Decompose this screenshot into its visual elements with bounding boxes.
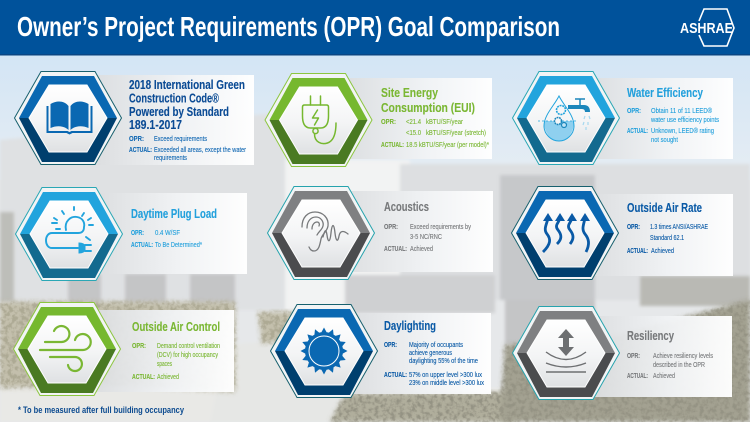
badge hexagon: book (14, 72, 122, 164)
icon: double arrow over curved layers (546, 329, 586, 372)
text: heading and values: ACTUAL: (384, 370, 407, 379)
text: heading and values: OPR: (131, 228, 144, 237)
text: heading and values: Standard 62.1 (650, 233, 684, 242)
icon: sun with cord and plug (46, 207, 93, 253)
text: heading and values: 3-5 NC/RNC (410, 232, 442, 241)
text: heading and values (131, 206, 217, 249)
text: heading and values: ACTUAL: (384, 244, 407, 253)
text: heading and values: OPR: (381, 117, 396, 126)
text: heading and values: Achieved (651, 246, 674, 255)
text: heading and values: Unknown, LEED® rating (651, 126, 714, 135)
text: heading and values: Obtain 11 of 11 LEED® (651, 106, 713, 115)
panel: Daytime Plug Load (16, 188, 247, 280)
text: heading and values: OPR: (384, 222, 398, 231)
ASHRAE logo: ASHRAE (680, 20, 733, 37)
text: heading and values: Site Energy (381, 85, 439, 100)
ASHRAE logo (680, 9, 734, 46)
text: heading and values: Acoustics (384, 199, 429, 214)
text: heading and values: 2018 International Green (129, 78, 245, 92)
panel: Water Efficiency (512, 72, 733, 164)
icon: open book (46, 102, 92, 134)
icon: sun with rays (300, 328, 348, 374)
text: heading and values: OPR: (627, 222, 640, 231)
text: heading and values: 0.4 W/SF (155, 228, 180, 237)
badge hexagon: power plug (265, 74, 372, 166)
panel: 2018 International Green Construction Code (14, 72, 254, 165)
text: heading and values (384, 318, 484, 387)
text: heading and values: OPR: (132, 341, 146, 350)
text: heading and values: described in the OPR (653, 360, 705, 369)
panel: Resiliency (512, 306, 732, 400)
badge hexagon: water drop and faucet (512, 72, 620, 164)
text: heading and values (627, 200, 708, 255)
panel: Daylighting (270, 304, 491, 398)
text: heading and values: Consumption (EUI) (381, 100, 475, 115)
text: heading and values: kBTU/SF/year (stretch) (426, 128, 486, 137)
header bar (0, 0, 750, 56)
text: heading and values: 1.3 times ANSI/ASHRAE (650, 222, 708, 231)
text: heading and values: kBTU/SF/year (426, 117, 463, 126)
text: heading and values: Outside Air Control (132, 319, 220, 334)
text: heading and values: Water Efficiency (627, 85, 704, 100)
icon: ear with sound wave (302, 212, 348, 251)
panel: Acoustics (268, 186, 493, 280)
title: Owner’s Project Requirements (OPR) Goal Comparison (17, 11, 560, 42)
icon: four wavy arrows (543, 213, 590, 252)
panel: Outside Air Control (14, 302, 234, 396)
text: heading and values: Outside Air Rate (627, 200, 702, 215)
text: heading and values: (DCV) for high occupancy (157, 350, 218, 359)
text: heading and values (129, 78, 246, 162)
text: heading and values: Demand control ventilation (157, 341, 220, 350)
badge hexagon: rising air arrows (512, 186, 618, 280)
text: heading and values: 23% on middle level >300 lux (409, 378, 484, 387)
badge hexagon: sun and plug (16, 188, 122, 280)
panel: Outside Air Rate (512, 186, 733, 280)
text: heading and values: OPR: (384, 340, 397, 349)
text: heading and values (384, 199, 471, 253)
text: heading and values: ACTUAL: (131, 240, 153, 249)
badge hexagon: resiliency arrow (512, 306, 620, 400)
text: heading and values: <15.0 (406, 128, 421, 137)
text: heading and values: Resiliency (627, 328, 675, 343)
text: heading and values: achieve generous (409, 348, 452, 357)
text: heading and values: Exceeded all areas, except the water (154, 145, 246, 154)
text: heading and values: 18.5 kBTU/SF/year (per model)* (406, 140, 489, 149)
text: heading and values: requirements (154, 153, 187, 162)
text: heading and values: OPR: (129, 134, 144, 143)
badge hexagon: sun (270, 304, 378, 398)
text: heading and values: Exceed requirements by (410, 222, 471, 231)
text: heading and values: Achieved (653, 371, 675, 380)
text: heading and values: daylighting 55% of the time (409, 356, 478, 365)
badge hexagon: ear (268, 186, 374, 280)
text: heading and values: ACTUAL: (627, 246, 648, 255)
text: heading and values: OPR: (627, 351, 640, 360)
text: heading and values: Powered by Standard (129, 105, 229, 119)
text: heading and values: ACTUAL: (627, 126, 648, 135)
text: heading and values: To Be Determined* (155, 240, 202, 249)
text: heading and values: Exceed requirements (154, 134, 207, 143)
text: heading and values: spaces (157, 359, 172, 368)
text: heading and values (627, 328, 713, 380)
icon: water drop with faucet (538, 96, 590, 141)
text: heading and values: not sought (651, 135, 678, 144)
text: heading and values (627, 85, 719, 144)
text: heading and values: Daytime Plug Load (131, 206, 217, 221)
text: heading and values: Achieved (157, 372, 179, 381)
text: heading and values: 189.1-2017 (129, 118, 182, 132)
text: heading and values: Construction Code® (129, 92, 220, 106)
text: heading and values: <21.4 (406, 117, 421, 126)
footnote: * To be measured after full building occupancy (18, 405, 185, 416)
text: heading and values: ACTUAL: (627, 371, 648, 380)
text: heading and values: Achieve resiliency levels (653, 351, 713, 360)
text: heading and values: Daylighting (384, 318, 436, 333)
text: heading and values: ACTUAL: (132, 372, 155, 381)
text: heading and values: 57% on upper level >300 lux (409, 370, 482, 379)
panel: Site Energy Consumption (265, 74, 492, 166)
text: heading and values (132, 319, 220, 381)
text: heading and values: water use efficiency points (650, 115, 719, 124)
text: heading and values (381, 85, 489, 149)
text: heading and values: OPR: (627, 106, 641, 115)
text: heading and values: Achieved (410, 244, 433, 253)
icon: plug with lightning bolt (302, 96, 336, 144)
text: heading and values: ACTUAL: (381, 140, 404, 149)
text: heading and values: Majority of occupants (409, 340, 463, 349)
badge hexagon: wind (14, 302, 120, 396)
icon: wind lines (40, 326, 91, 371)
text: heading and values: ACTUAL: (129, 145, 152, 154)
